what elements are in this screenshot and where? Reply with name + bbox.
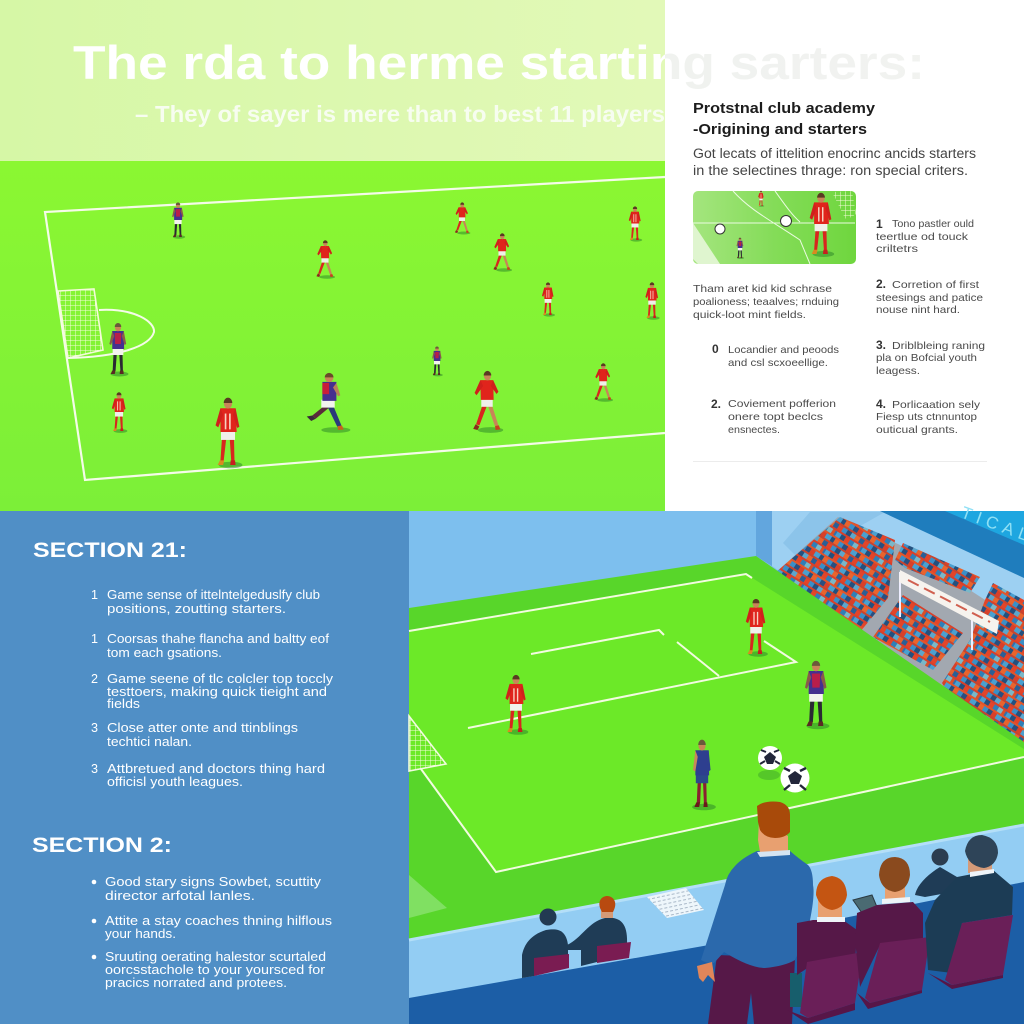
- list: left column item 2: onere topt beclcs: [728, 411, 823, 423]
- seat: maroon chair three: [928, 915, 1013, 989]
- player: centre defender: [432, 346, 443, 376]
- football: small: [758, 746, 782, 780]
- coach: left seated orange hair: [567, 896, 631, 966]
- coach: small man in distance: [915, 848, 957, 897]
- list: section 21 item 2: Coorsas thahe flancha and baltty eof: [107, 632, 330, 646]
- coach: seated boy with red hair: [790, 876, 857, 1007]
- list: right column item 2: 2.: [876, 277, 886, 291]
- list: right column item 4: Fiesp uts ctnnuntop: [876, 411, 977, 423]
- goal net left: [409, 716, 446, 771]
- list: right column item 3: [876, 338, 985, 377]
- crowd block 1: [775, 517, 895, 632]
- football: large: [780, 764, 810, 792]
- tactics sheet: [647, 888, 704, 918]
- panel: stadium scene: [409, 503, 1024, 1024]
- stand wall column: [756, 511, 772, 566]
- list: left column item 0: [712, 342, 839, 369]
- coach: seated man with tablet: [853, 857, 923, 987]
- bullet: good stary: [92, 875, 322, 903]
- player: centre left forward: [316, 240, 335, 279]
- stadium banner and goal: [899, 570, 999, 650]
- list: section 21 item 4: 3: [91, 721, 98, 735]
- stand top band: [880, 503, 1024, 578]
- list: section 21 item 1: 1: [91, 588, 98, 602]
- list: right column item 2: [876, 277, 983, 316]
- list: right column item 1: teertlue od touck: [876, 231, 969, 243]
- player: blue right: [805, 661, 829, 729]
- list: section 21 item 3: Game seene of tlc colcler top toccly: [107, 672, 334, 686]
- list: left column item 0: and csl scxoeellige.: [728, 357, 828, 369]
- stand stairs: [775, 517, 1024, 745]
- list: section 21 item 1: positions, zoutting starters.: [107, 602, 286, 616]
- list: right column item 2: nouse nint hard.: [876, 304, 960, 316]
- title: The rda to herme starting sarters:: [73, 36, 925, 89]
- pitch markings: [45, 177, 665, 480]
- player: goalkeeper: [109, 323, 128, 376]
- coach: left seated dark hair: [522, 908, 569, 978]
- list: right column item 4: Porlicaation sely: [892, 399, 981, 411]
- player: red left: [505, 675, 528, 735]
- player: right lower: [594, 363, 613, 402]
- crowd block 2: [895, 543, 980, 593]
- navy foreground: [409, 882, 1024, 1024]
- list: section 21 item 4: Close atter onte and ttinblings: [107, 721, 298, 735]
- list: section 21 item 5: 3: [91, 762, 98, 776]
- list: right column item 1: criltetrs: [876, 243, 918, 255]
- bullet: attite: [92, 914, 332, 941]
- panel: sections sidebar: [0, 511, 409, 1024]
- list: right column item 1: Tono pastler ould: [892, 218, 974, 230]
- panel: top football pitch: [0, 161, 665, 511]
- list: right column item 3: 3.: [876, 338, 886, 352]
- list: left column item 2: 2.: [711, 397, 721, 411]
- crowd block 3: [873, 595, 963, 670]
- bullet: sruuting: [92, 950, 326, 990]
- list: section 21 item 3: fields: [107, 697, 140, 711]
- bullet: sruuting: oorcsstachole to your yoursced for: [105, 963, 325, 977]
- list: right column item 4: [876, 397, 981, 436]
- intro text: in the selectines thrage: ron special criters.: [693, 163, 968, 178]
- list: section 21 item 4: [91, 721, 298, 749]
- heading: academy: [693, 100, 876, 138]
- intro text: [693, 146, 976, 178]
- player: top-left midfielder: [172, 202, 185, 239]
- crowd block 4: [942, 583, 1024, 745]
- player: red top: [746, 599, 768, 657]
- coach: standing man in blue sweater: [697, 802, 814, 1024]
- list: left column item 0: 0: [712, 342, 719, 356]
- list: section 21 item 2: 1: [91, 632, 98, 646]
- goal net and penalty arc: [58, 289, 154, 358]
- heading: section 21: SECTION 21:: [33, 539, 187, 562]
- player: far right: [645, 282, 660, 320]
- pitch surround: [409, 556, 1024, 940]
- text block: left column note: [693, 283, 839, 321]
- list: section 21 item 3: 2: [91, 672, 98, 686]
- bullet: sruuting: pracics norrated and protees.: [105, 976, 287, 990]
- list: left column item 0: Locandier and peoods: [728, 344, 839, 356]
- player: blue centre: [692, 740, 716, 810]
- list: right column item 3: Driblbleing raning: [892, 340, 985, 352]
- list: section 21 item 5: officisl youth leagues.: [107, 775, 243, 789]
- list: left column item 2: Coviement pofferion: [728, 398, 836, 410]
- text block: left column note: Tham aret kid kid schrase: [693, 283, 832, 295]
- intro text: Got lecats of ittelition enocrinc ancids starters: [693, 146, 976, 161]
- bullet: good stary: Good stary signs Sowbet, scuttity: [105, 875, 322, 889]
- bullet: good stary: director arfotal lanles.: [105, 889, 255, 903]
- seat: maroon chair one: [787, 952, 863, 1024]
- player: kicking opponent: [307, 373, 350, 433]
- list: section 21 item 4: techtici nalan.: [107, 735, 192, 749]
- subtitle: – They of sayer is mere than to best 11 players: [135, 101, 665, 127]
- panel: academy information: [665, 0, 1024, 511]
- panel: top banner: [0, 0, 665, 161]
- player: lower right striker: [473, 371, 503, 433]
- list: section 21 item 1: [91, 588, 320, 616]
- list: section 21 item 3: [91, 672, 334, 711]
- player: top right: [629, 206, 642, 242]
- heading: section 2: SECTION 2:: [32, 834, 172, 857]
- list: right column item 2: steesings and patice: [876, 292, 983, 304]
- list: section 21 item 3: testtoers, making quick tieight and: [107, 685, 327, 699]
- bullet: attite: Attite a stay coaches thning hilflous: [105, 914, 332, 928]
- coach: dark haired man on right: [925, 835, 1013, 973]
- list: section 21 item 5: [91, 762, 325, 789]
- pitch markings: [409, 574, 1024, 872]
- dugout strip: [409, 825, 1024, 998]
- list: right column item 4: 4.: [876, 397, 886, 411]
- bullet: sruuting: Sruuting oerating halestor scurtaled: [105, 950, 326, 964]
- pitch corner wedge: [409, 875, 447, 918]
- player: lower left: [112, 392, 127, 433]
- heading: academy: -Origining and starters: [693, 121, 867, 138]
- list: right column item 2: Corretion of first: [892, 279, 979, 291]
- list: left column item 2: [711, 397, 836, 436]
- player: upper centre winger: [493, 233, 512, 272]
- list: right column item 3: leagess.: [876, 365, 920, 377]
- list: left column item 2: ensnectes.: [728, 424, 780, 436]
- player: number 11 in front: [216, 398, 243, 468]
- text block: left column note: quick-loot mint fields.: [693, 309, 806, 321]
- thumbnail: training illustration: [693, 191, 856, 264]
- text block: left column note: poalioness; teaalves; rnduing: [693, 296, 839, 308]
- list: section 21 item 5: Attbretued and doctors thing hard: [107, 762, 325, 776]
- pitch playing area: [409, 574, 1024, 872]
- list: right column item 1: 1: [876, 217, 883, 231]
- player: top centre: [455, 202, 470, 234]
- list: right column item 3: pla on Bofcial youth: [876, 352, 977, 364]
- bullet: attite: your hands.: [105, 927, 176, 941]
- list: right column item 4: outicual grants.: [876, 424, 958, 436]
- player: right centre: [542, 282, 555, 317]
- heading: academy: Protstnal club academy: [693, 100, 876, 117]
- list: section 21 item 1: Game sense of ittelntelgeduslfy club: [107, 588, 320, 602]
- list: section 21 item 2: tom each gsations.: [107, 646, 222, 660]
- list: right column item 1: [876, 217, 974, 255]
- seat: maroon chair two: [857, 937, 930, 1009]
- list: section 21 item 2: [91, 632, 330, 660]
